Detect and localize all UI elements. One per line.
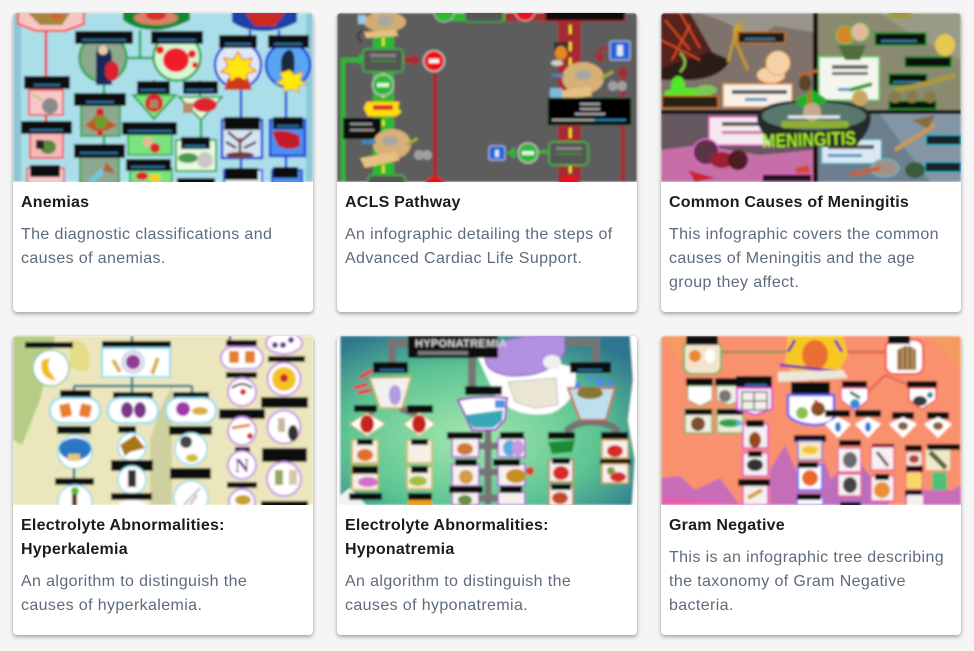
card description: causes of Meningitis and the age	[669, 250, 915, 267]
card description	[345, 226, 613, 267]
panel: Hyperkalemia card	[13, 336, 313, 635]
panel: Gram Negative card	[661, 336, 961, 635]
card description	[21, 226, 272, 267]
card title: ACLS Pathway: ACLS Pathway	[345, 194, 461, 211]
card description: An algorithm to distinguish the	[21, 573, 247, 590]
panel: ACLS Pathway card	[337, 13, 637, 312]
thumbnail: meningitis illustration	[661, 13, 961, 182]
thumbnail: ACLS flow chart	[337, 13, 637, 182]
card title: Electrolyte Abnormalities: Hyponatremia	[345, 517, 549, 558]
card description: Advanced Cardiac Life Support.	[345, 250, 582, 267]
card title: Electrolyte Abnormalities: Hyponatremia: Hyponatremia	[345, 541, 454, 558]
card description: group they affect.	[669, 274, 799, 291]
thumbnail: hyperkalemia algorithm: N	[235, 455, 250, 477]
card description: This is an infographic tree describing	[669, 549, 944, 566]
thumbnail: meningitis illustration: MENINGITIS	[762, 128, 856, 153]
thumbnail: anemias classification tree	[13, 13, 313, 182]
card description	[21, 573, 247, 614]
card title: Electrolyte Abnormalities: Hyperkalemia: Hyperkalemia	[21, 541, 128, 558]
thumbnail: hyperkalemia algorithm	[13, 336, 313, 505]
thumbnail: hyponatremia algorithm	[338, 336, 636, 505]
card title: Electrolyte Abnormalities: Hyperkalemia	[21, 517, 225, 558]
card description: causes of hyperkalemia.	[21, 597, 202, 614]
card title: Common Causes of Meningitis: Common Causes of Meningitis	[669, 194, 909, 211]
card title: Anemias: Anemias	[21, 194, 89, 211]
thumbnail: gram negative taxonomy tree	[661, 336, 961, 505]
card description	[669, 226, 939, 291]
panel: Anemias card	[13, 13, 313, 312]
card description: This infographic covers the common	[669, 226, 939, 243]
panel: Hyponatremia card	[337, 336, 637, 635]
card description: bacteria.	[669, 597, 734, 614]
card description: the taxonomy of Gram Negative	[669, 573, 906, 590]
card description: An algorithm to distinguish the	[345, 573, 571, 590]
panel: Common Causes of Meningitis card	[661, 13, 961, 312]
card title: Electrolyte Abnormalities: Hyponatremia: Electrolyte Abnormalities:	[345, 517, 549, 534]
card description: An infographic detailing the steps of	[345, 226, 613, 243]
card description	[669, 549, 944, 614]
card description: The diagnostic classifications and	[21, 226, 272, 243]
card description: causes of anemias.	[21, 250, 166, 267]
card title: Electrolyte Abnormalities: Hyperkalemia: Electrolyte Abnormalities:	[21, 517, 225, 534]
card description	[345, 573, 571, 614]
card title: Gram Negative: Gram Negative	[669, 517, 785, 534]
thumbnail: hyponatremia algorithm: HYPONATREMIA	[415, 338, 507, 350]
card description: causes of hyponatremia.	[345, 597, 528, 614]
